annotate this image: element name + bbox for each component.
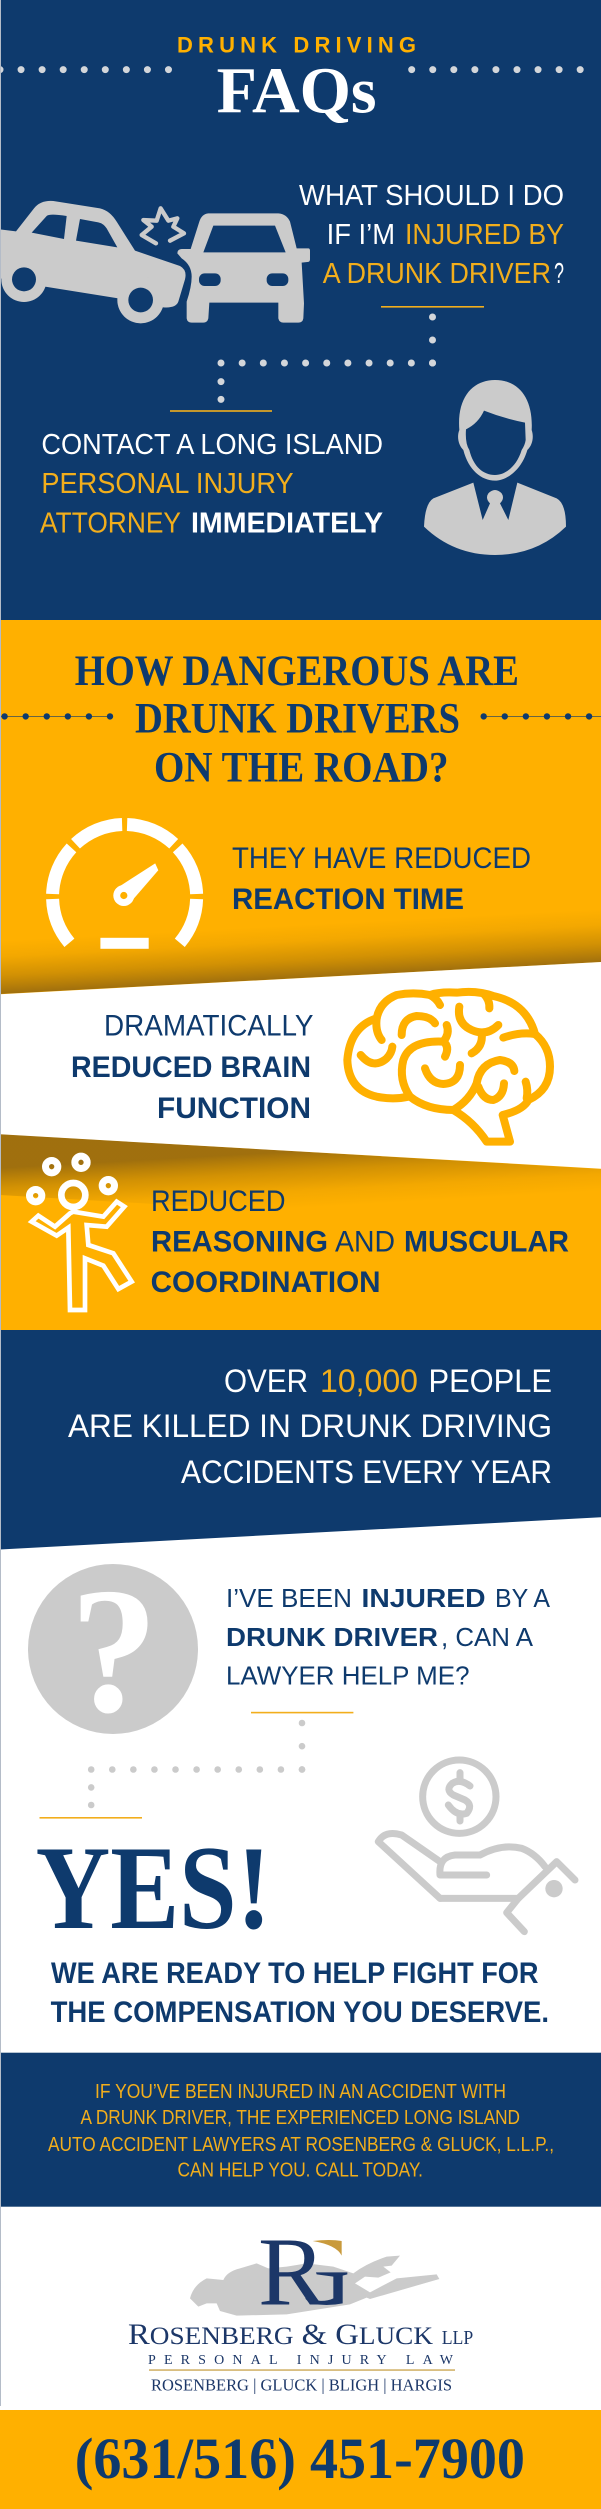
- panel: can a lawyer help: [28, 1551, 575, 2029]
- question text: [299, 180, 564, 290]
- icon: question mark circle: [28, 1551, 198, 1750]
- panel: call to action: [0, 2053, 601, 2207]
- heading: HOW DANGEROUS ARE: [75, 648, 519, 695]
- question text: LAWYER HELP ME?: [226, 1660, 470, 1690]
- coordination text: REDUCED: [151, 1185, 286, 1218]
- subtitle: Drunk Driving: DRUNK DRIVING: [177, 33, 416, 58]
- white angled band: [0, 962, 601, 1169]
- shadow above band: [0, 905, 601, 994]
- yellow rule above answer: [40, 1817, 142, 1819]
- question text: DRUNK DRIVER: [226, 1622, 438, 1652]
- compensation text: WE ARE READY TO HELP FIGHT FOR: [51, 1957, 539, 1990]
- heading: [75, 648, 519, 792]
- answer text: [40, 429, 383, 540]
- question text: , CAN A: [441, 1622, 534, 1652]
- coordination text: AND: [335, 1225, 395, 1258]
- reaction time text: [232, 842, 531, 916]
- compensation text: [51, 1957, 549, 2029]
- brain text: [71, 1010, 314, 1125]
- question text: INJURED BY: [405, 219, 564, 251]
- title: FAQs: FAQs: [217, 55, 377, 128]
- yellow rule under question: [381, 306, 484, 308]
- call to action text: [48, 2080, 554, 2182]
- answer text: ATTORNEY: [40, 508, 181, 540]
- tagline: PERSONAL INJURY LAW: [148, 2353, 454, 2368]
- statistic text: ARE KILLED IN DRUNK DRIVING: [68, 1408, 552, 1444]
- icon: car crash: [0, 201, 310, 323]
- panel: phone number: [0, 2410, 601, 2509]
- answer text: CONTACT A LONG ISLAND: [41, 429, 383, 461]
- compensation text: THE COMPENSATION YOU DESERVE.: [51, 1996, 549, 2029]
- panel: how dangerous: [0, 620, 601, 1330]
- logo map: Long Island: [190, 2256, 439, 2316]
- icon: question mark circle: ?: [70, 1551, 158, 1750]
- gold rule: [149, 2369, 455, 2371]
- question text: BY A: [495, 1583, 551, 1613]
- icon: hand with coin: [378, 1760, 575, 1932]
- brain text: REDUCED BRAIN: [71, 1051, 311, 1084]
- reaction time text: THEY HAVE REDUCED: [232, 842, 531, 875]
- heading: ON THE ROAD?: [154, 745, 448, 792]
- question text: I’VE BEEN: [226, 1583, 352, 1613]
- heading: DRUNK DRIVERS: [135, 696, 460, 742]
- answer text: PERSONAL INJURY: [41, 468, 294, 500]
- panel: statistic: [0, 1330, 601, 1550]
- question text: ?: [554, 258, 564, 290]
- icon: attorney: [424, 380, 566, 555]
- answer: YES!: YES!: [36, 1821, 271, 1954]
- firm name: LLP: [442, 2327, 473, 2349]
- coordination text: MUSCULAR: [404, 1225, 569, 1258]
- question text: WHAT SHOULD I DO: [299, 180, 564, 212]
- question text: INJURED: [362, 1583, 486, 1613]
- brain text: FUNCTION: [157, 1092, 311, 1125]
- left dotted rule: [0, 66, 169, 73]
- statistic text: ACCIDENTS EVERY YEAR: [181, 1454, 552, 1490]
- panel: intro question and answer: [0, 0, 601, 620]
- yellow rule above answer: [170, 410, 272, 412]
- call to action text: A DRUNK DRIVER, THE EXPERIENCED LONG ISLAND: [80, 2106, 520, 2129]
- icon: juggler: [29, 1156, 132, 1310]
- question text: [226, 1583, 551, 1690]
- coordination text: [151, 1185, 569, 1299]
- shadow below band: [0, 1134, 601, 1230]
- question text: IF I’M: [327, 219, 395, 251]
- left dotted rule: [0, 715, 111, 717]
- call to action text: IF YOU’VE BEEN INJURED IN AN ACCIDENT WITH: [95, 2080, 506, 2103]
- statistic text: PEOPLE: [428, 1363, 552, 1399]
- coordination text: REASONING: [151, 1225, 328, 1258]
- partner names: ROSENBERG | GLUCK | BLIGH | HARGIS: [151, 2376, 452, 2395]
- phone number: (631/516) 451-7900: [75, 2426, 525, 2491]
- answer text: IMMEDIATELY: [191, 508, 383, 540]
- reaction time text: REACTION TIME: [232, 883, 464, 916]
- dotted connector: [91, 1723, 303, 1806]
- question text: A DRUNK DRIVER: [323, 258, 551, 290]
- brain text: DRAMATICALLY: [104, 1010, 314, 1043]
- statistic text: [68, 1363, 552, 1490]
- call to action text: CAN HELP YOU. CALL TODAY.: [178, 2159, 423, 2182]
- logo monogram: R: [258, 2218, 327, 2326]
- coordination text: COORDINATION: [151, 1266, 381, 1299]
- icon: speedometer: [53, 824, 197, 949]
- yellow rule under question: [251, 1712, 353, 1713]
- statistic text: 10,000: [320, 1363, 418, 1399]
- statistic text: OVER: [224, 1363, 308, 1399]
- firm name: ROSENBERG & GLUCK: [128, 2318, 433, 2351]
- right dotted rule: [412, 66, 601, 73]
- icon: brain: [347, 992, 550, 1142]
- right dotted rule: [484, 715, 601, 717]
- logo: Rosenberg & Gluck: [128, 2218, 473, 2395]
- dotted connector: [221, 317, 433, 400]
- left edge line: [0, 0, 1, 2406]
